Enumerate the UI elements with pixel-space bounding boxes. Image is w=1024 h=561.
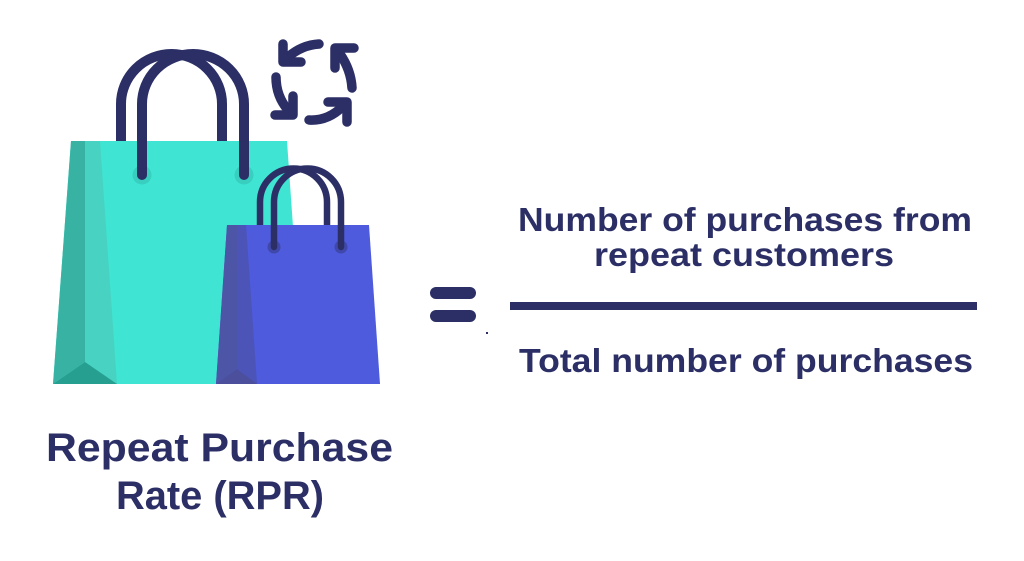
formula numerator: repeat customers (594, 236, 894, 273)
icon: large teal shopping bag (53, 54, 304, 384)
icon: circular repeat arrows (275, 44, 354, 122)
title: Rate (RPR) (116, 474, 324, 518)
formula numerator (518, 201, 972, 273)
formula denominator: Total number of purchases (519, 342, 973, 379)
icon: small blue shopping bag (216, 168, 380, 384)
fraction bar (510, 302, 977, 310)
speck near equals sign (486, 332, 488, 334)
equals sign (430, 287, 476, 322)
title: Repeat Purchase (46, 426, 393, 470)
formula numerator: Number of purchases from (518, 201, 972, 238)
title (46, 426, 393, 518)
